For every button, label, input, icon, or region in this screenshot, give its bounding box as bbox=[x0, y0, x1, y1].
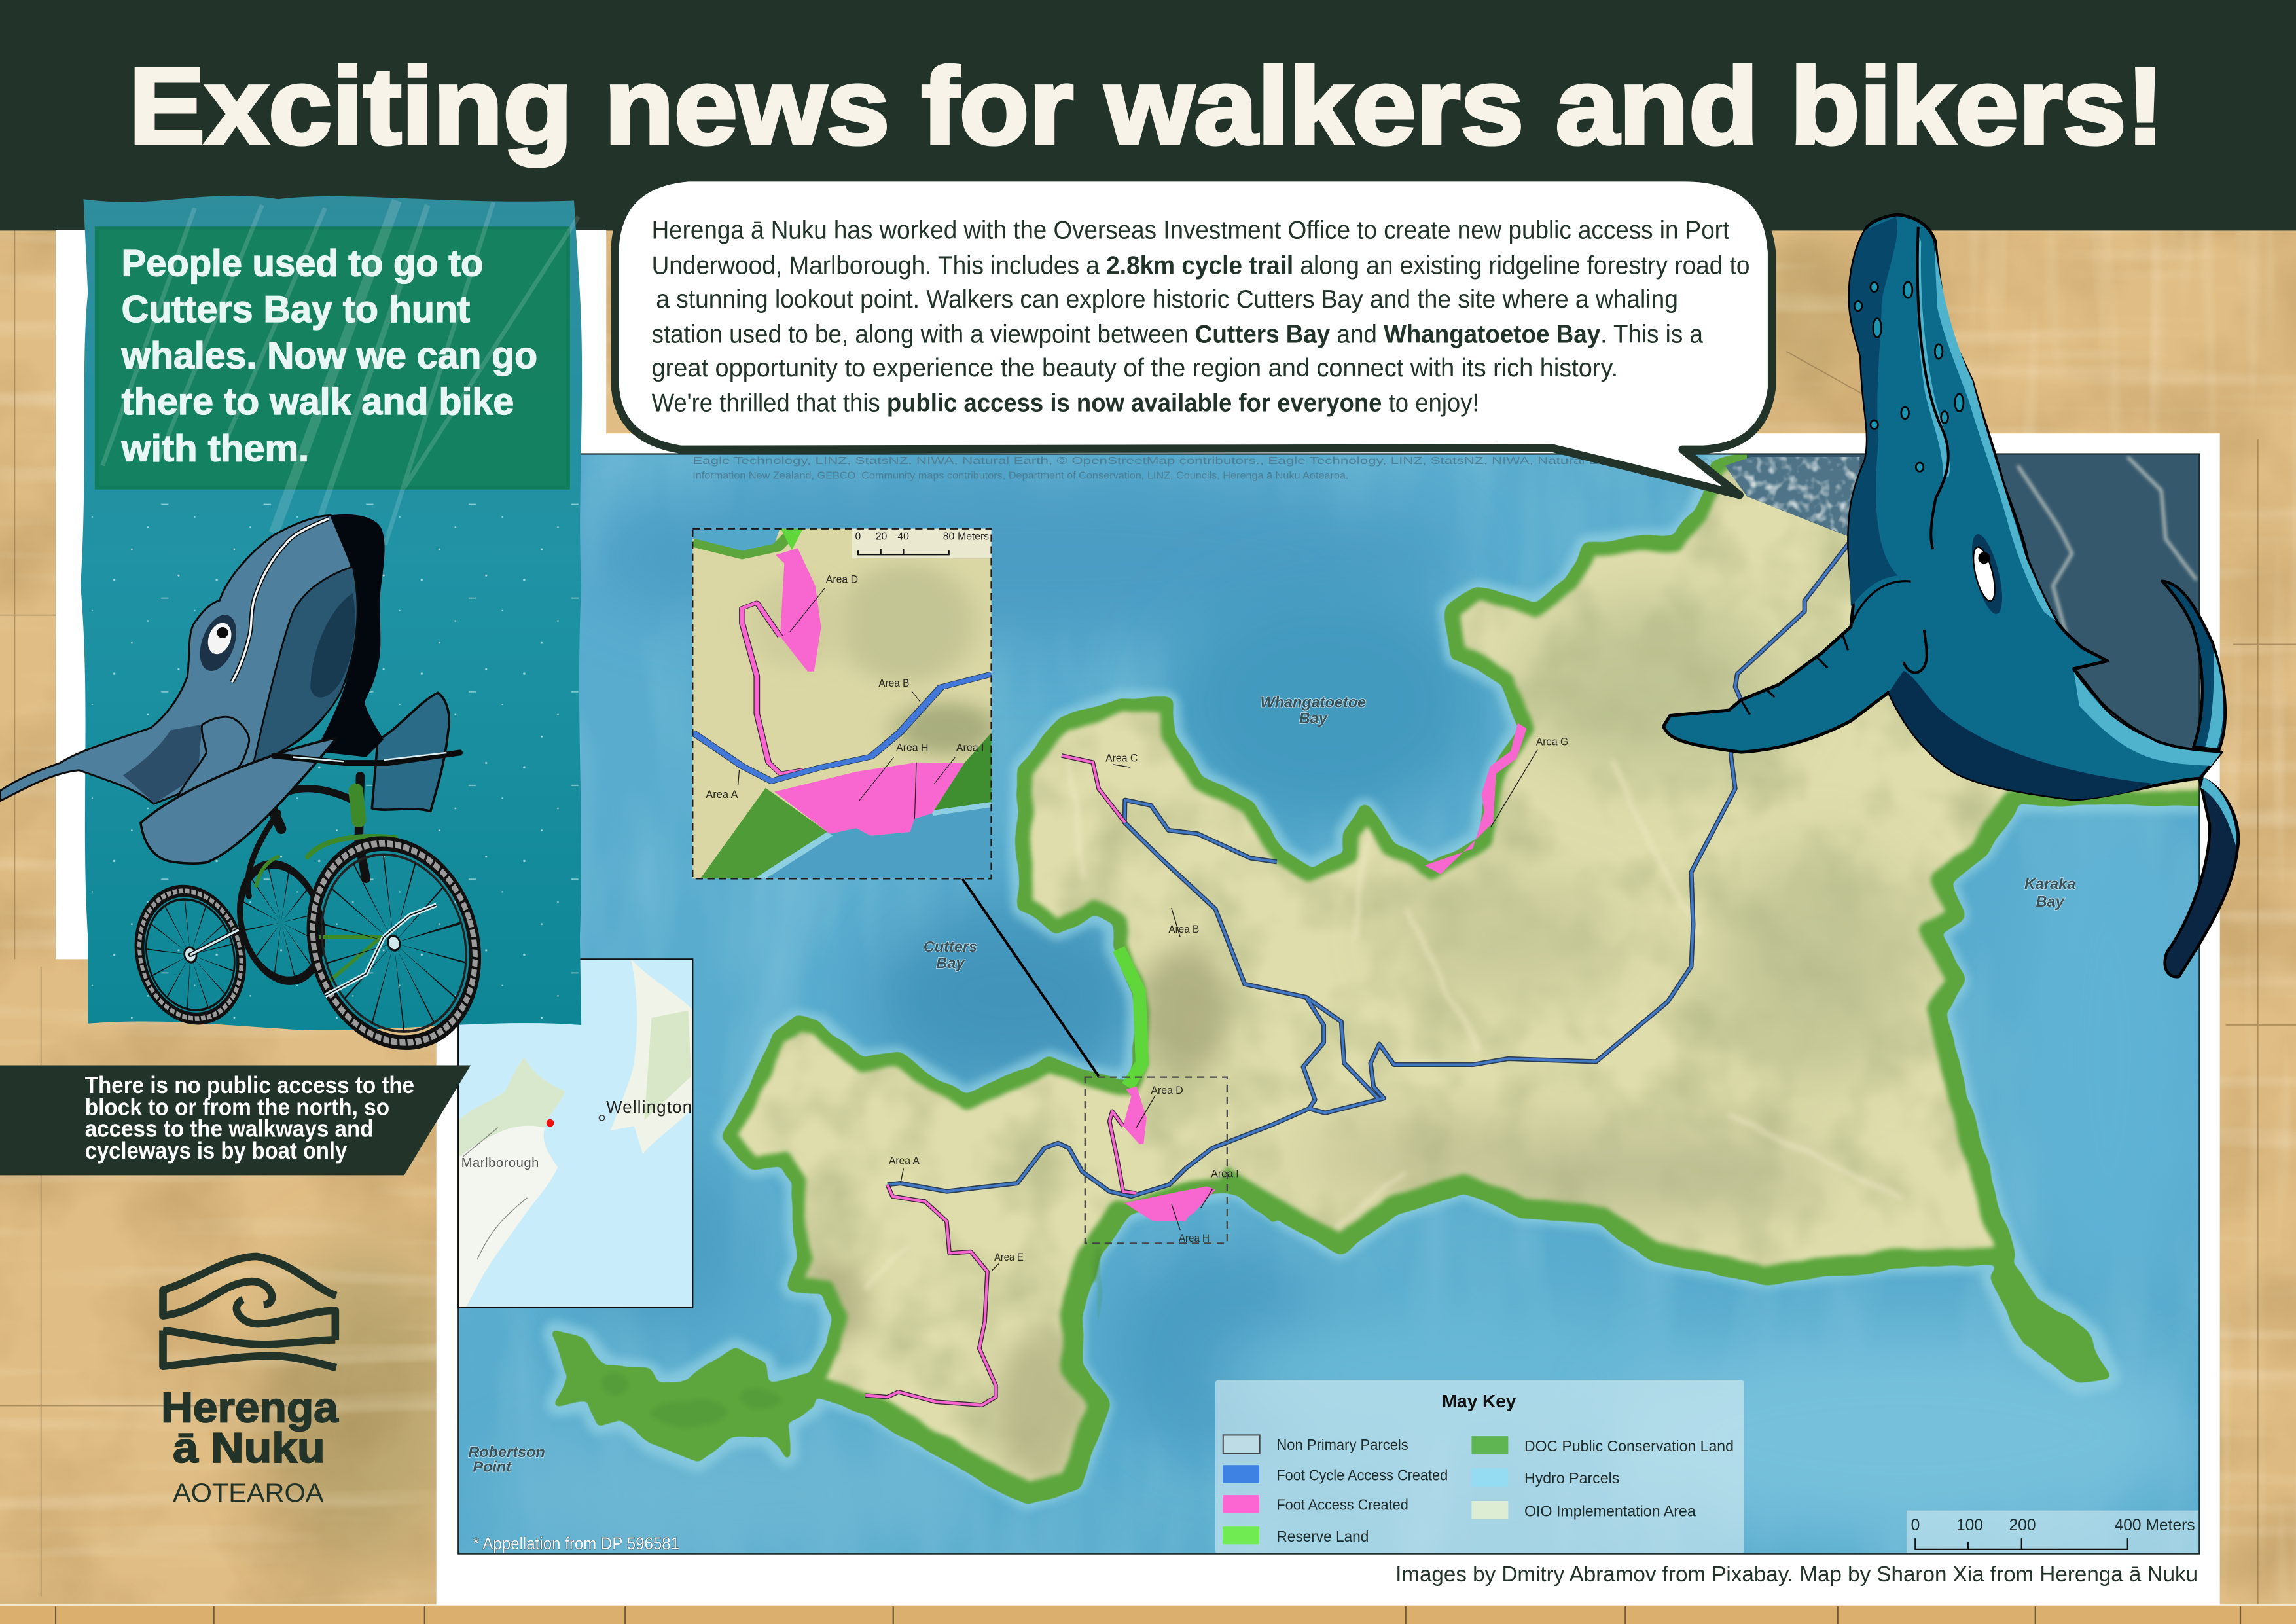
whale flipper crease bbox=[1903, 630, 1927, 672]
map scale bar: 100 bbox=[1956, 1517, 1983, 1534]
whale mid flipper bbox=[174, 717, 249, 804]
inset labels bbox=[706, 573, 984, 801]
panel heading bbox=[121, 243, 537, 470]
upper fluke highlight bbox=[2205, 652, 2223, 748]
inset scale bar: 40 bbox=[897, 531, 909, 542]
logo wordmark: ā Nuku bbox=[173, 1424, 325, 1471]
inset labels: Area B bbox=[878, 677, 909, 689]
legend swatches bbox=[1223, 1435, 1508, 1544]
upper tail fluke bbox=[2162, 581, 2225, 749]
locator map: Wellington bbox=[606, 1098, 692, 1117]
whale head groove bbox=[1918, 227, 1948, 549]
background: bottom paper strip bbox=[0, 1605, 2296, 1624]
area labels: Area E bbox=[994, 1251, 1024, 1263]
whale fin bumps bbox=[1741, 581, 1911, 715]
whale bumps bbox=[1854, 282, 1964, 471]
caption: Images by Dmitry Abramov from Pixabay. Map by Sharon Xia from Herenga ā Nuku bbox=[1395, 1562, 2198, 1587]
legend labels: DOC Public Conservation Land bbox=[1524, 1437, 1734, 1454]
bay labels bbox=[468, 694, 2075, 1475]
inset zoom map bbox=[692, 528, 999, 879]
bay labels: Cutters bbox=[924, 938, 977, 955]
map panel bbox=[439, 432, 2240, 1581]
whale body bbox=[1664, 215, 2221, 799]
bay labels: Whangatoetoe bbox=[1260, 694, 1366, 711]
left wheel bbox=[126, 879, 255, 1030]
rear wheel bbox=[228, 855, 334, 990]
white backing panel left bbox=[56, 230, 606, 959]
teal panel bbox=[81, 196, 582, 1030]
handlebar highlight bbox=[293, 753, 446, 761]
whale pale tail edge bbox=[2073, 669, 2221, 766]
map attribution text: Information New Zealand, GEBCO, Community maps contributors, Department of Conservation, LINZ, Councils, Herenga ā Nuku Aotearoa. bbox=[692, 471, 1349, 482]
bay labels: Karaka bbox=[2024, 875, 2075, 892]
legend labels: Hydro Parcels bbox=[1524, 1470, 1619, 1487]
zoom extent box bbox=[1085, 1077, 1227, 1243]
area labels: Area A bbox=[889, 1155, 920, 1167]
area labels: Area I bbox=[1211, 1168, 1239, 1180]
whale side panel bbox=[253, 567, 357, 765]
ribbon note: block to or from the north, so bbox=[85, 1094, 389, 1121]
whale eye bbox=[193, 610, 243, 676]
whale dark head side bbox=[1849, 217, 1897, 606]
bubble text bbox=[652, 217, 1750, 418]
logo wordmark: Herenga bbox=[161, 1383, 339, 1431]
land with conservation coast bbox=[552, 454, 2199, 1504]
ribbon note: cycleways is by boat only bbox=[85, 1138, 347, 1164]
area labels: Area D bbox=[1151, 1084, 1183, 1096]
area labels: Area C bbox=[1105, 751, 1138, 764]
map scale bar: 400 Meters bbox=[2115, 1517, 2195, 1534]
ribbon note: access to the walkways and bbox=[85, 1116, 373, 1142]
bubble text: Herenga ā Nuku has worked with the Overseas Investment Office to create new public access in Port bbox=[652, 217, 1729, 245]
bubble text: station used to be, along with a viewpoint between Cutters Bay and Whangatoetoe Bay. This is a bbox=[652, 320, 1703, 348]
map border bbox=[458, 454, 2199, 1554]
whale pale back edge bbox=[1934, 242, 2056, 621]
tricycle bbox=[126, 776, 499, 1063]
whale front flipper bbox=[141, 738, 337, 863]
forest block bbox=[1713, 439, 2226, 761]
inset scale bar: 0 bbox=[855, 531, 861, 542]
locator map bbox=[458, 959, 692, 1308]
inset scale bar bbox=[855, 531, 989, 554]
coastal shallows bbox=[556, 432, 2226, 1495]
speech bubble bbox=[615, 181, 1772, 495]
inset labels: Area I bbox=[956, 742, 984, 754]
bubble text: great opportunity to experience the beauty of the region and connect with its rich history. bbox=[652, 354, 1618, 382]
legend labels: Foot Cycle Access Created bbox=[1276, 1467, 1448, 1484]
light rays bbox=[103, 200, 579, 545]
map scale bar bbox=[1907, 1511, 2199, 1554]
map attribution text bbox=[694, 457, 1724, 481]
big front wheel bbox=[289, 823, 499, 1063]
whale stripe bbox=[232, 518, 329, 682]
whale back bbox=[315, 514, 385, 757]
inset scale bar: Meters bbox=[958, 531, 989, 542]
bay labels: Bay bbox=[1299, 710, 1329, 727]
inset labels: Area A bbox=[706, 788, 738, 801]
handlebar bbox=[274, 753, 459, 763]
frame bbox=[190, 776, 395, 981]
whale eye bbox=[1965, 532, 2008, 617]
whale dark belly bbox=[1889, 671, 2153, 799]
legend labels: Non Primary Parcels bbox=[1276, 1436, 1408, 1453]
logo: Herenga a Nuku bbox=[161, 1256, 339, 1507]
panel heading: there to walk and bike bbox=[122, 381, 514, 423]
inset border bbox=[692, 529, 992, 878]
whale groove highlight bbox=[1917, 234, 1950, 480]
whale on tricycle bbox=[0, 514, 449, 863]
legend labels: OIO Implementation Area bbox=[1524, 1503, 1696, 1520]
inset labels: Area D bbox=[826, 573, 858, 585]
land shading bbox=[439, 439, 2240, 1581]
pedals and cranks bbox=[325, 905, 437, 996]
title: Exciting news for walkers and bikers! bbox=[129, 46, 2164, 167]
area labels: Area H bbox=[1179, 1232, 1210, 1244]
logo wave mark bbox=[163, 1256, 336, 1367]
logo subtitle: AOTEAROA bbox=[173, 1478, 324, 1507]
white backing panel map bbox=[437, 433, 2220, 1605]
bay labels: Point bbox=[473, 1458, 512, 1475]
map scale bar: 0 bbox=[1911, 1517, 1920, 1534]
map attribution text: Eagle Technology, LINZ, StatsNZ, NIWA, Natural Earth, © OpenStreetMap contributors., Eagle Technology, LINZ, StatsNZ, NIWA, Natural Earth, © OpenStreetMap contributors., Eagle Technology, LINZ, StatsNZ, NIWA, Natural Earth bbox=[692, 456, 2199, 467]
appellation note: * Appellation from DP 596581 bbox=[473, 1534, 679, 1553]
bubble top white bbox=[619, 181, 1767, 293]
legend title: May Key bbox=[1442, 1391, 1516, 1411]
callout line to inset bbox=[963, 879, 1099, 1076]
bay labels: Robertson bbox=[468, 1443, 545, 1460]
legend labels bbox=[1276, 1436, 1734, 1545]
inset scale bar: 20 bbox=[876, 531, 888, 542]
green text box bbox=[97, 228, 568, 488]
panel heading: Cutters Bay to hunt bbox=[122, 289, 470, 331]
bay labels: Bay bbox=[2036, 893, 2066, 910]
bubble text: We're thrilled that this public access is now available for everyone to enjoy! bbox=[652, 389, 1479, 418]
foot access created: pink areas and trails bbox=[865, 723, 1526, 1405]
legend labels: Foot Access Created bbox=[1276, 1496, 1408, 1513]
header band bbox=[0, 0, 2296, 230]
foot and cycle access: blue road bbox=[888, 543, 1849, 1197]
humpback whale bbox=[1664, 215, 2238, 977]
bubble text: Underwood, Marlborough. This includes a 2.8km cycle trail along an existing ridgeline forestry road to bbox=[652, 251, 1750, 280]
ribbon note bbox=[0, 1066, 471, 1175]
DOC public conservation land coast bbox=[556, 432, 2226, 1495]
inset scale bar: 80 bbox=[943, 531, 954, 542]
whale tail dark inner edge bbox=[2073, 669, 2221, 752]
land: OIO implementation area bbox=[729, 432, 2226, 1495]
whale side shadow bbox=[310, 593, 355, 698]
whale body bbox=[0, 515, 358, 804]
area labels: Area G bbox=[1536, 736, 1568, 748]
bay labels: Bay bbox=[936, 954, 965, 971]
panel heading: People used to go to bbox=[122, 243, 483, 285]
legend labels: Reserve Land bbox=[1276, 1528, 1369, 1545]
darker forest within conservation land bbox=[602, 1245, 1104, 1426]
lower tail fluke bbox=[2165, 778, 2238, 977]
legend panel bbox=[1215, 1380, 1744, 1554]
area labels bbox=[889, 736, 1568, 1263]
area leader lines bbox=[901, 749, 1537, 1271]
bubble text: a stunning lookout point. Walkers can explore historic Cutters Bay and the site where a whaling bbox=[656, 285, 1678, 314]
reserve land bbox=[1119, 949, 1142, 1087]
ribbon note: There is no public access to the bbox=[85, 1072, 414, 1098]
whale underside bbox=[123, 725, 202, 803]
whale far flipper bbox=[372, 693, 449, 811]
locator border bbox=[458, 959, 692, 1308]
lower fluke highlight bbox=[2201, 778, 2236, 846]
whale stripe highlight bbox=[232, 518, 329, 682]
inset labels: Area H bbox=[896, 742, 928, 754]
locator map: Marlborough bbox=[461, 1156, 539, 1170]
logo wordmark bbox=[161, 1383, 339, 1471]
area labels: Area B bbox=[1168, 923, 1199, 935]
map scale bar: 200 bbox=[2009, 1517, 2036, 1534]
panel heading: with them. bbox=[121, 428, 309, 470]
panel heading: whales. Now we can go bbox=[121, 335, 537, 377]
